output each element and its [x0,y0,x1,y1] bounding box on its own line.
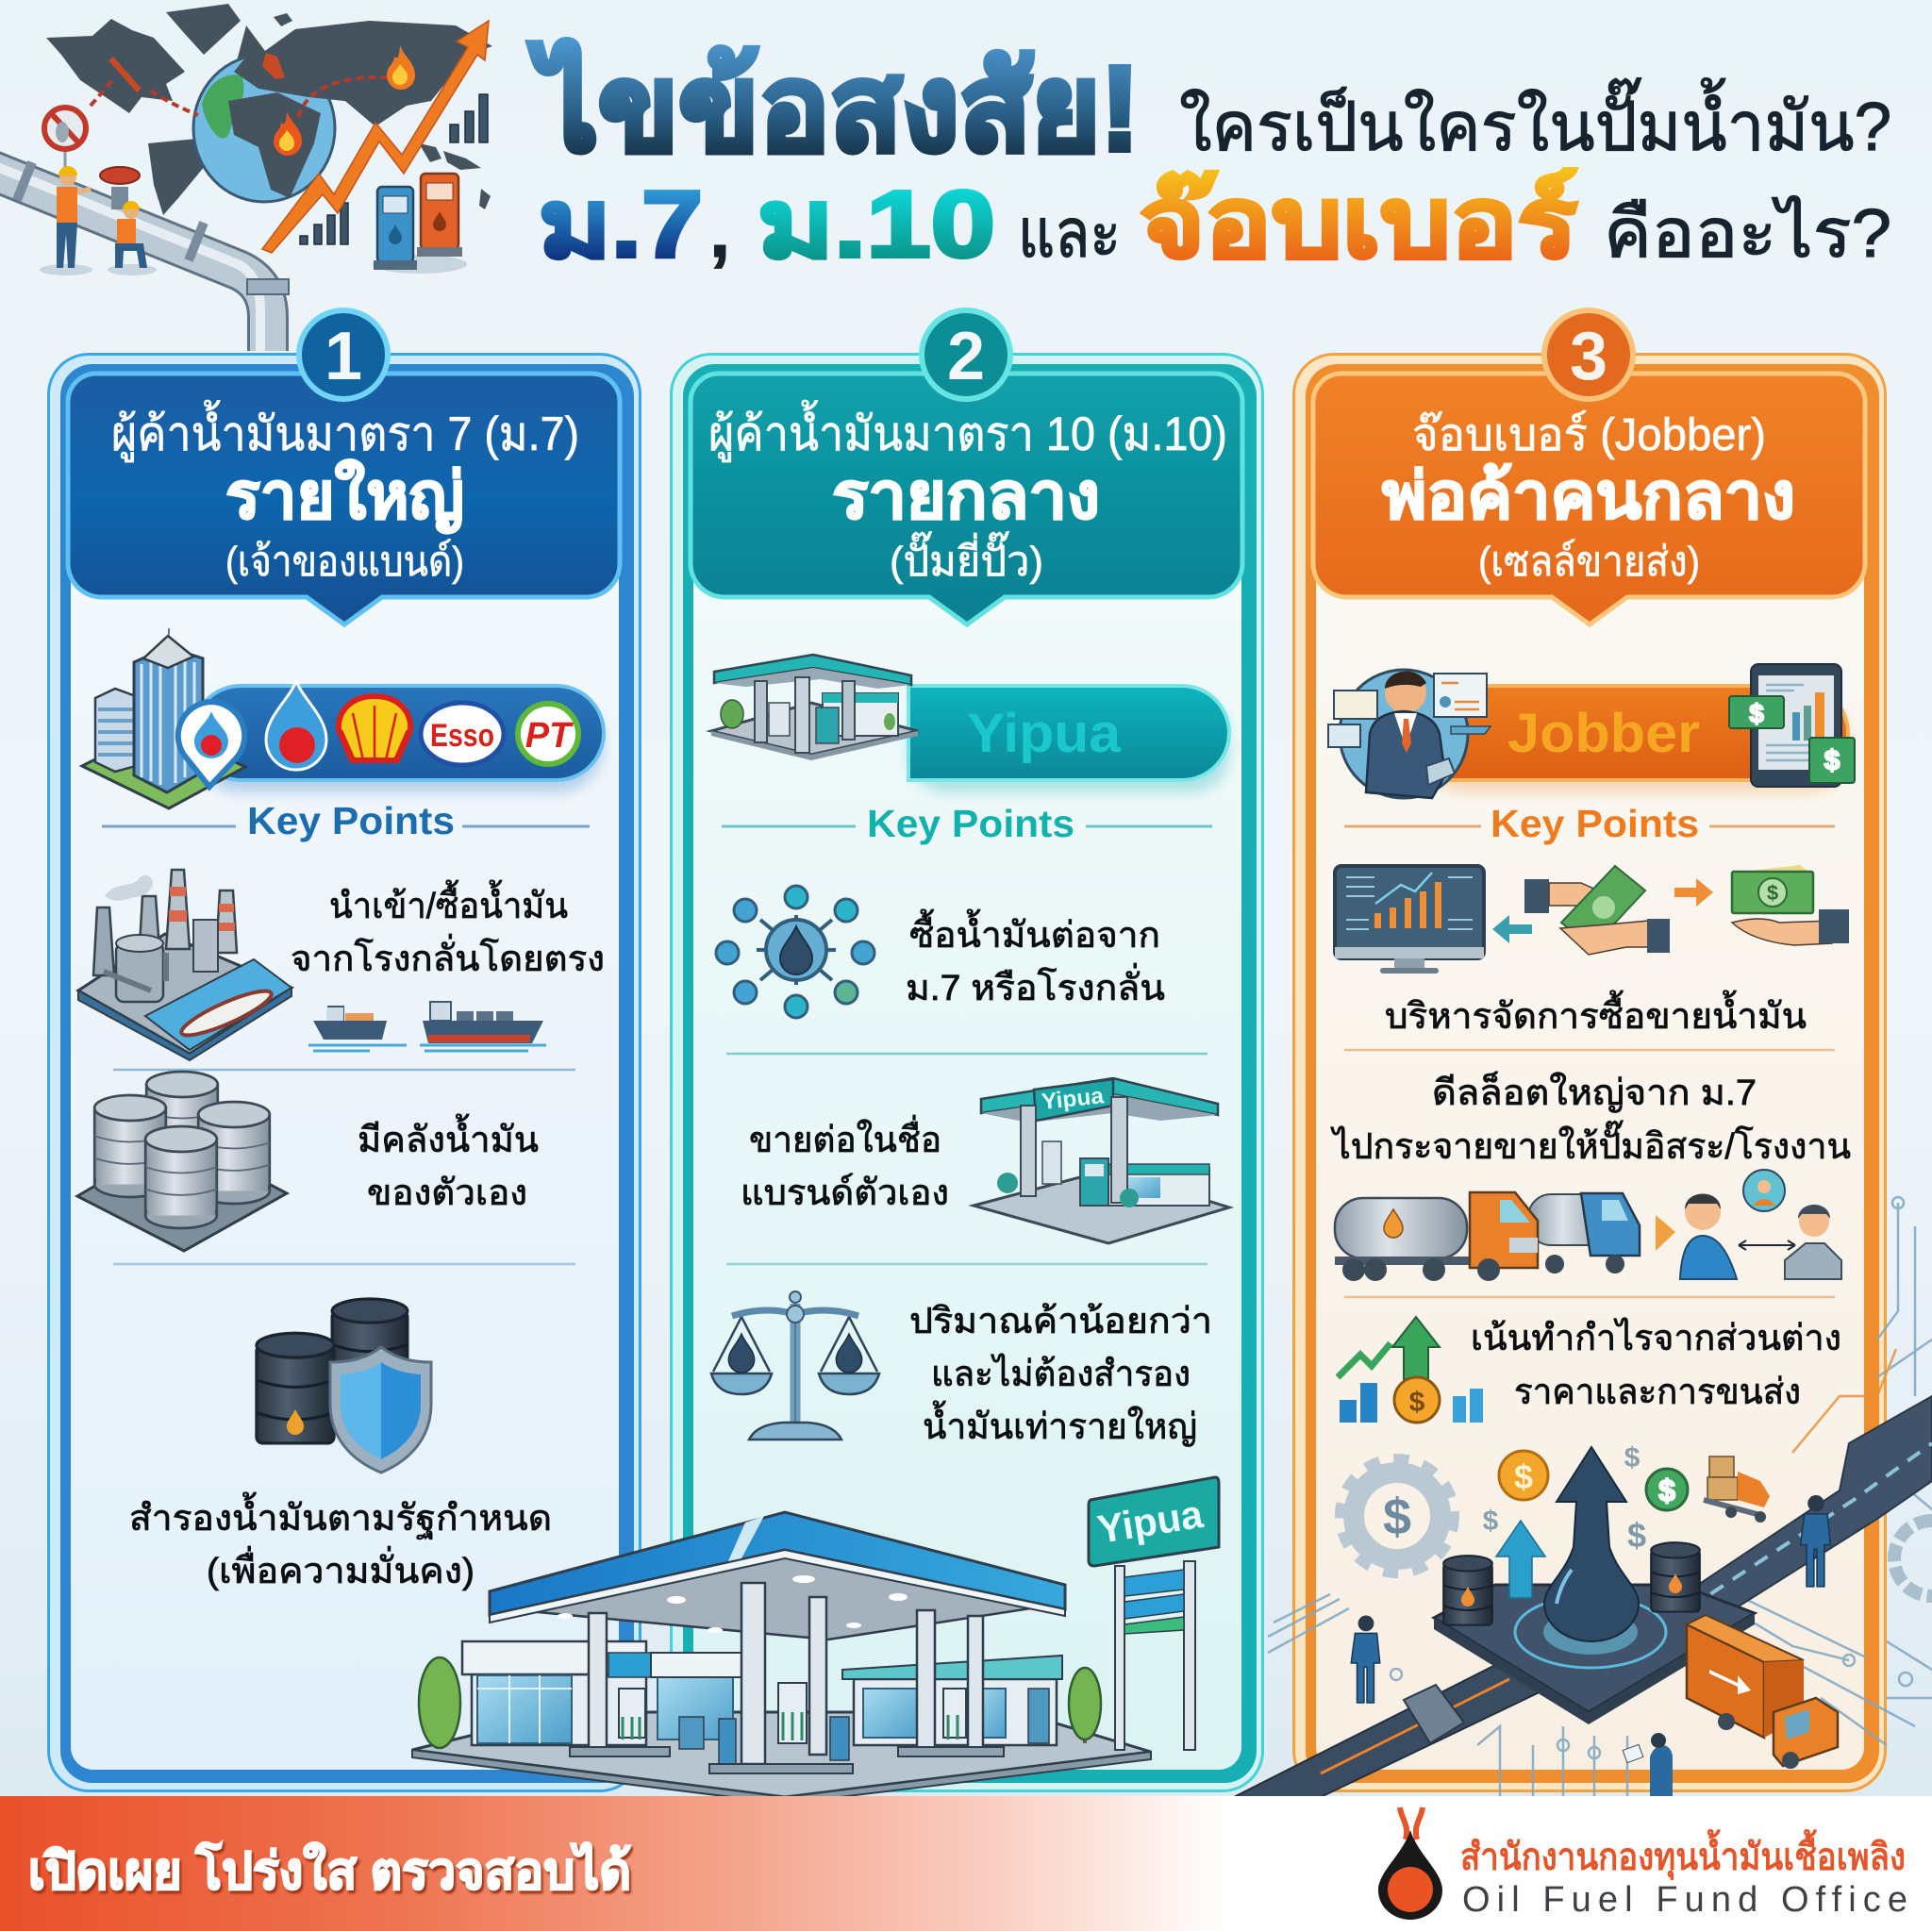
header banner: (เจ้าของแบนด์) [225,539,464,585]
icon: tablet with chart and cash: $ [1749,699,1764,728]
icon: delivery cart with boxes [1704,1457,1770,1523]
organisation name english: Oil Fuel Fund Office [1462,1880,1907,1920]
icon: coins: $ [1483,1506,1499,1537]
number badge 3: 3 [1570,319,1607,394]
text: own oil depot [358,1113,539,1213]
arrow: orange right [1674,878,1713,907]
number badge 1: 1 [325,319,362,394]
icon: barrels and shield [257,1299,431,1473]
text: sells under own brand: ขายต่อในชื่อ [749,1115,941,1160]
icon: balance scales with drops [711,1291,879,1440]
panel: m.10 mid-size trader [670,308,1264,1792]
icon: oil storage tanks [77,1072,287,1251]
text: buys from m.7 or refinery: ม.7 หรือโรงกลั่น [906,963,1165,1008]
logo: Esso: Esso [430,718,494,754]
header banner: จ๊อบเบอร์ (Jobber) [1412,410,1766,460]
icon: blue arrow [1496,1521,1545,1598]
title: คืออะไร? [1604,195,1891,272]
illustration: world map, oil price arrow, pumps and pipeline [0,4,492,351]
text: manage trade: บริหารจัดการซื้อขายน้ำมัน [1385,990,1807,1037]
logo: Shell [339,696,410,760]
tree right [1069,1668,1101,1743]
text: profit from margin and logistics: เน้นทำกำไรจากส่วนต่าง [1471,1318,1841,1358]
valve [100,167,140,209]
circuit platform [1434,1585,1755,1724]
canopy [490,1512,1065,1640]
title: และ [1018,196,1121,272]
text: import directly from refineries: จากโรงกลั่นโดยตรง [291,934,605,979]
icon: dollar gear [1341,1459,1454,1573]
illustration: large gas station [412,1477,1219,1804]
title line 2 m7: ม.7 [539,172,703,277]
icon: yipua branded station: Yipua [1041,1083,1106,1115]
panel: jobber middleman [1292,308,1887,1792]
brand pill Yipua: Yipua [967,703,1122,764]
globe [193,21,396,202]
text: buy big lots and distribute [1330,1071,1851,1167]
world map [46,4,492,215]
fuel pumps [373,174,467,274]
logo: Esso [421,703,504,765]
pipeline road left [1234,1656,1547,1797]
title [527,40,1891,278]
header banner [691,374,1242,624]
header banner: ผู้ค้าน้ำมันมาตรา 10 (ม.10) [708,400,1227,462]
footer bar [0,1796,1932,1931]
logo: PT: PT [525,716,574,756]
arrow: orange triangle [1656,1215,1675,1251]
text: mandated reserves: (เพื่อความมั่นคง) [207,1546,475,1591]
panel frame [47,353,641,1792]
title line 1: ไขข้อสงสัย! [527,40,1140,176]
canopy columns [589,1583,983,1764]
text: lower volume, lower reserves: น้ำมันเท่ารายใหญ่ [923,1400,1197,1447]
icon: coins [1483,1442,1688,1555]
brand pill with logos [193,681,604,792]
dashed routes [91,77,387,117]
text: buys from m.7 or refinery [906,908,1165,1008]
header banner: รายกลาง [832,460,1100,532]
title line 2 m10: ม.10 [758,172,995,277]
header banner: (ปั๊มยี่ปั๊ว) [890,531,1043,585]
no sign [44,108,86,174]
icon: orange delivery truck [1687,1615,1838,1769]
icon: background gear right [1894,1521,1932,1596]
text: import directly from refineries: นำเข้า/ซื้อน้ำมัน [329,879,568,926]
header banner [1313,374,1865,624]
people [1351,1495,1830,1796]
logo: oil fuel fund drop [1378,1807,1442,1920]
arrow: teal left [1492,915,1532,943]
text: import directly from refineries [291,879,605,979]
icon: people exchanging [1680,1170,1841,1279]
panel frame [670,353,1264,1792]
icon: coins: $ [1624,1442,1641,1473]
icon: cash in open hand: $ [1767,881,1778,905]
logo: PT [518,704,578,764]
number badge 1 [296,308,391,402]
text: buy big lots and distribute: ไปกระจายขายให้ปั๊มอิสระ/โรงงาน [1330,1121,1851,1167]
panel frame [1292,353,1887,1792]
header banner [68,374,620,624]
flames [108,45,415,156]
icon: small gas station [711,655,918,760]
tree left [419,1657,460,1748]
left store [462,1641,755,1749]
brand pill Jobber: Jobber [1507,703,1700,764]
text: lower volume, lower reserves: ปริมาณค้าน้อยกว่า [909,1302,1212,1341]
icon: profit growth [1338,1317,1483,1423]
icon: cash in open hand [1732,865,1849,945]
text: sells under own brand: แบรนด์ตัวเอง [741,1173,949,1213]
icon: tablet with chart and cash [1729,664,1855,787]
icon: coins: $ [1514,1457,1533,1496]
icon: profit growth: $ [1409,1387,1425,1418]
icon: businessman with documents [1328,670,1491,798]
icon: barrels [1443,1542,1700,1625]
text: buy big lots and distribute: ดีลล็อตใหญ่จาก ม.7 [1432,1071,1757,1113]
workers [40,166,157,275]
illustration: oil logistics scene [1234,1197,1932,1797]
header banner: พ่อค้าคนกลาง [1382,460,1795,532]
brand pill Yipua [908,686,1229,792]
icon: big oil drop with upward arrow [1544,1447,1639,1641]
circuit lines [1268,1197,1932,1796]
footer slogan: เปิดเผย โปร่งใส ตรวจสอบได้ [28,1841,631,1900]
forecourt [412,1712,1151,1797]
text: lower volume, lower reserves: และไม่ต้องสำรอง [931,1354,1191,1394]
icon: yipua branded station [974,1078,1229,1243]
title line 2 jobber: จ๊อบเบอร์ [1140,168,1577,278]
pipeline [0,160,289,351]
icon: supply network [716,886,874,1018]
fuel dispensers [570,1683,1004,1773]
bar charts [300,94,488,244]
title: , [709,189,730,273]
text: sells under own brand [741,1115,949,1213]
icon: dollar gear: $ [1383,1489,1411,1545]
subtitle question: ใครเป็นใครในปั๊มน้ำมัน? [1179,77,1891,165]
text: mandated reserves: สำรองน้ำมันตามรัฐกำหนด [129,1491,552,1540]
number badge 3 [1541,308,1636,402]
icon: tanker ships [308,1002,546,1051]
text: profit from margin and logistics: ราคาและการขนส่ง [1514,1373,1801,1412]
icon: hands exchanging cash [1524,866,1670,955]
number badge 2: 2 [947,319,985,394]
key points heading: Key Points [247,799,455,842]
sign pylon: Yipua [1094,1491,1207,1552]
text: buys from m.7 or refinery: ซื้อน้ำมันต่อจาก [909,908,1160,956]
icon: coins: $ [1658,1473,1675,1507]
text: lower volume, lower reserves [909,1302,1212,1447]
icon: corporate towers with location pin [82,628,245,808]
header banner: ผู้ค้าน้ำมันมาตรา 7 (ม.7) [111,400,579,462]
icon: refinery and port [78,870,291,1060]
text: mandated reserves [129,1491,552,1591]
logo: PTT flame [266,681,326,770]
icon: coins: $ [1627,1516,1646,1555]
icon: trading monitor [1335,866,1484,974]
orange rising arrow [262,21,489,253]
key points heading: Key Points [1491,802,1699,845]
brand pill Jobber [1424,686,1848,792]
panel: m.7 major trader [47,308,641,1792]
header banner: (เซลล์ขายส่ง) [1478,539,1700,585]
text: profit from margin and logistics [1471,1318,1841,1412]
icon: tablet with chart and cash: $ [1824,745,1840,776]
key points heading: Key Points [867,802,1074,845]
header banner: รายใหญ่ [225,458,464,534]
number badge 2 [919,308,1013,402]
text: own oil depot: ของตัวเอง [367,1174,527,1213]
icon: fuel tanker trucks [1335,1192,1640,1281]
right store [842,1656,1062,1745]
text: own oil depot: มีคลังน้ำมัน [358,1113,539,1160]
sign pylon [1089,1477,1219,1750]
road right [1670,1396,1932,1632]
